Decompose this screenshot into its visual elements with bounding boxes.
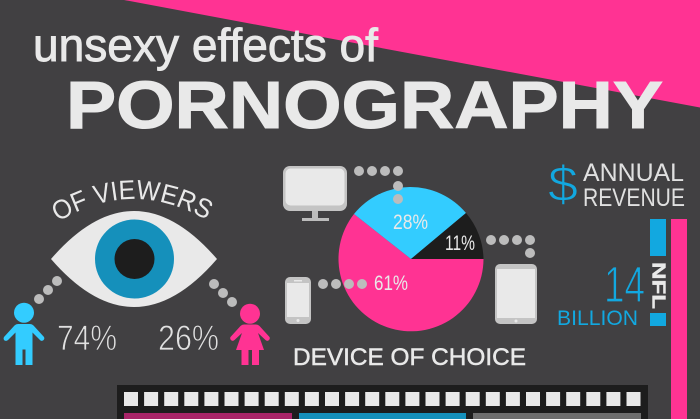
revenue value: 14 billion: 14 bbox=[604, 256, 645, 313]
title: unsexy effects of bbox=[33, 19, 378, 71]
panel: device of choice bbox=[283, 166, 537, 371]
revenue value: 14 billion bbox=[557, 256, 645, 330]
nfl bar bbox=[648, 219, 668, 326]
title: PORNOGRAPHY bbox=[66, 68, 663, 143]
dots to female bbox=[209, 279, 237, 307]
dots to male bbox=[34, 276, 62, 304]
icon: male figure bbox=[4, 303, 44, 365]
curved heading: of viewers: OF VIEWERS bbox=[53, 180, 212, 218]
icon: tablet bbox=[495, 264, 537, 324]
film sprocket holes bbox=[124, 392, 640, 406]
film frame: blue bbox=[299, 413, 466, 419]
heading: annual revenue bbox=[583, 159, 685, 212]
icon: phone bbox=[285, 277, 311, 324]
pie label 61%: 61% bbox=[374, 272, 408, 295]
panel: annual revenue bbox=[548, 156, 687, 419]
dots from tablet bbox=[486, 235, 535, 258]
heading: device of choice: DEVICE OF CHOICE bbox=[293, 344, 526, 371]
icon: female figure bbox=[230, 304, 270, 365]
revenue value: 14 billion: BILLION bbox=[557, 306, 638, 330]
icon: dollar sign: $ bbox=[548, 156, 578, 212]
pie chart bbox=[339, 187, 484, 331]
pink comparison bar bbox=[671, 219, 687, 419]
female percentage: 26% bbox=[158, 319, 219, 358]
dots from monitor bbox=[354, 166, 403, 204]
dots from phone bbox=[318, 279, 367, 289]
film frame: pink bbox=[124, 413, 292, 419]
pink corner banner bbox=[124, 0, 700, 108]
panel: viewers bbox=[4, 180, 270, 365]
icon: eye bbox=[51, 211, 217, 307]
nfl bar: NFL bbox=[648, 262, 668, 309]
pie label 28%: 28% bbox=[393, 211, 428, 234]
title bbox=[33, 19, 663, 143]
male percentage: 74% bbox=[57, 319, 117, 358]
film frame: grey bbox=[473, 413, 641, 419]
heading: annual revenue: ANNUAL bbox=[583, 159, 684, 187]
film strip bbox=[117, 385, 648, 419]
icon: desktop monitor bbox=[283, 166, 347, 221]
pie label 11%: 11% bbox=[445, 232, 475, 255]
